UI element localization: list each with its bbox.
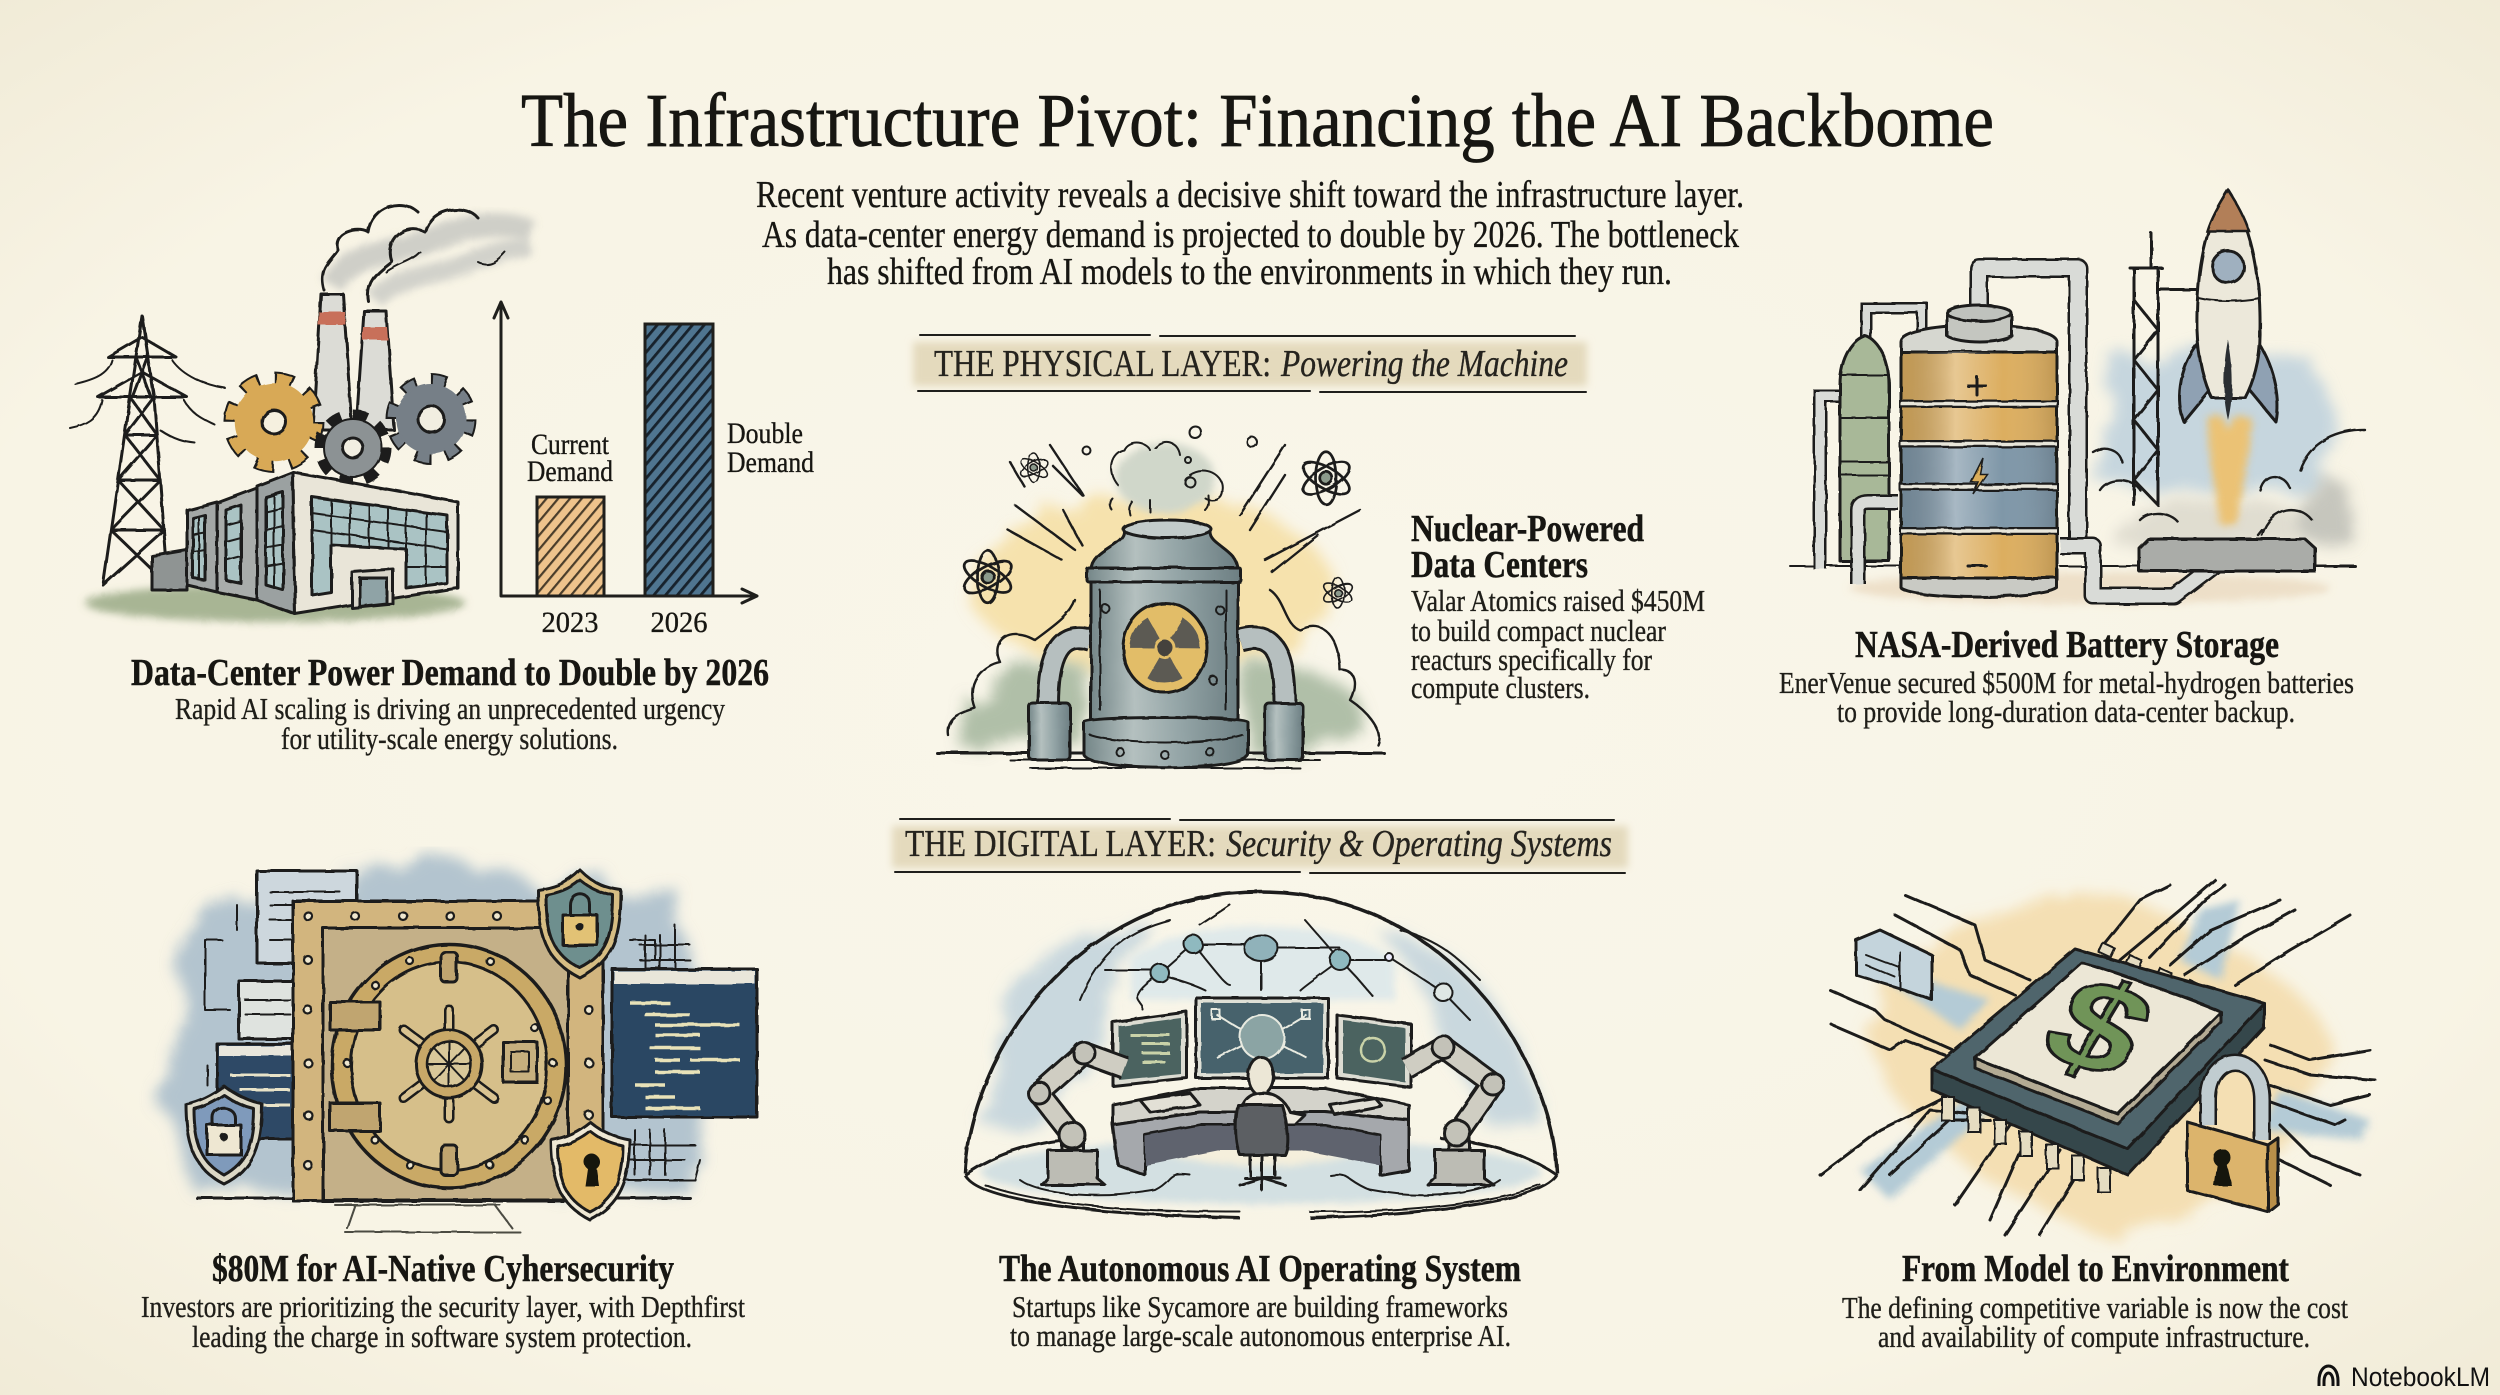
description: power demand (175, 691, 725, 756)
rocket (2180, 190, 2277, 422)
rays and cloud outlines (1008, 445, 1360, 572)
description: operating system (1010, 1289, 1511, 1353)
description: battery: EnerVenue secured $500M for metal-hydrogen batteries (1779, 665, 2354, 700)
banner: digital layer: Security & Operating Systems (1226, 823, 1612, 865)
circuit traces (1820, 880, 2375, 1235)
illustration: factory, pylon and gears (70, 205, 530, 622)
banner: physical layer: Powering the Machine (1280, 343, 1568, 385)
bar chart: demand growth: 2026 (650, 606, 708, 639)
description: nuclear: compute clusters. (1411, 670, 1590, 705)
banner: digital layer (892, 819, 1628, 873)
description: nuclear: Valar Atomics raised $450M (1411, 583, 1705, 618)
robot arms (1028, 1036, 1504, 1185)
heading: cybersecurity: $80M for AI-Native Cyhersecurity (212, 1248, 674, 1290)
circuit grids (625, 925, 700, 1180)
control desk (1113, 1088, 1409, 1175)
radiation symbol (1123, 603, 1207, 693)
bar chart: demand growth: Demand (727, 446, 814, 479)
vault door frame (293, 901, 603, 1201)
blue lock shield (186, 1086, 262, 1184)
steam cloud outline (1110, 442, 1222, 515)
padlock (2187, 1062, 2278, 1212)
description: nuclear (1411, 583, 1705, 705)
smokestacks (313, 294, 394, 430)
intro text block (756, 174, 1744, 293)
description: cybersecurity: Investors are prioritizing the security layer, with Depthfirst (141, 1289, 745, 1324)
description: model to environment: The defining competitive variable is now the cost (1842, 1290, 2348, 1325)
bar chart: demand growth: 2023 (542, 606, 598, 639)
bar chart: demand growth (494, 302, 814, 639)
atoms (960, 452, 1355, 608)
intro text block: Recent venture activity reveals a decisive shift toward the infrastructure layer. (756, 174, 1744, 216)
large steel gear (394, 382, 468, 456)
description: cybersecurity (141, 1289, 745, 1354)
reactor vessel (1084, 520, 1248, 768)
description: battery: to provide long-duration data-center backup. (1837, 694, 2295, 729)
description: power demand: Rapid AI scaling is driving an unprecedented urgency (175, 691, 725, 726)
description: power demand: for utility-scale energy solutions. (281, 721, 618, 756)
heading: nuclear: Nuclear-Powered (1411, 508, 1644, 550)
illustration: compute chip with dollar and padlock (1820, 880, 2375, 1235)
bar chart: demand growth: Double (727, 417, 803, 450)
monitors (1113, 998, 1411, 1087)
illustration: glass dome control room (965, 892, 1557, 1218)
intro text block: has shifted from AI models to the environments in which they run. (827, 251, 1672, 293)
lower side pipe (1858, 502, 1898, 584)
heading: nuclear: Data Centers (1411, 544, 1588, 586)
battery stack (1899, 305, 2059, 597)
launch platform (2139, 539, 2315, 571)
panel: data-center power demand (70, 205, 814, 756)
gold keyhole shield (551, 1122, 630, 1220)
battery pipes (1820, 268, 2225, 596)
code window (612, 969, 757, 1117)
chip package (1932, 943, 2264, 1192)
NotebookLM logo: NotebookLM (2351, 1362, 2490, 1392)
intro text block: As data-center energy demand is projected to double by 2026. The bottleneck (762, 214, 1739, 256)
reactor pipes (1029, 638, 1303, 760)
launch tower (2130, 233, 2197, 505)
data-center building (152, 472, 458, 614)
teal lock shield (538, 870, 621, 978)
panel: from model to environment (1820, 880, 2375, 1354)
description: operating system: Startups like Sycamore are building frameworks (1012, 1289, 1508, 1324)
illustration: battery and rocket (1790, 190, 2365, 604)
banner: digital layer: THE DIGITAL LAYER: (905, 823, 1216, 865)
network nodes (1080, 905, 1480, 1020)
banner: physical layer: THE PHYSICAL LAYER: (934, 343, 1271, 385)
panel: AI-native cybersecurity (141, 865, 757, 1354)
heading: operating system: The Autonomous AI Operating System (999, 1248, 1521, 1290)
illustration: nuclear reactor (937, 426, 1384, 768)
description: battery (1779, 665, 2354, 729)
panel: autonomous AI operating system (965, 892, 1557, 1353)
dome outline (965, 892, 1557, 1173)
description: operating system: to manage large-scale autonomous enterprise AI. (1010, 1318, 1511, 1353)
panel: nuclear-powered data centers (937, 426, 1705, 768)
heading: battery: NASA-Derived Battery Storage (1855, 624, 2279, 666)
gold gear (233, 381, 315, 463)
description: cybersecurity: leading the charge in software system protection. (192, 1319, 692, 1354)
description: nuclear: to build compact nuclear (1411, 613, 1667, 648)
heading: power demand: Data-Center Power Demand to Double by 2026 (131, 652, 769, 694)
bar chart: demand growth: Current (531, 428, 610, 461)
small steel gear (322, 417, 384, 479)
illustration: bank vault with shields (165, 865, 757, 1232)
exhaust flame (2207, 415, 2252, 525)
operator and chair (1236, 1057, 1305, 1190)
heading: model to environment: From Model to Environment (1902, 1248, 2289, 1290)
server block (1856, 930, 1932, 1000)
description: nuclear: reacturs specifically for (1411, 642, 1653, 677)
banner: physical layer (913, 335, 1587, 392)
document windows (205, 871, 357, 1139)
green gas tank (1840, 336, 1889, 561)
description: model to environment: and availability of compute infrastructure. (1878, 1319, 2310, 1354)
bar chart: demand growth: Demand (527, 455, 613, 488)
description: model to environment (1842, 1290, 2348, 1354)
heading: nuclear (1411, 508, 1644, 586)
dollar sign: $ (2019, 950, 2179, 1105)
panel: NASA-derived battery storage (1779, 190, 2365, 729)
title: The Infrastructure Pivot: Financing the AI Backbome (521, 79, 1994, 163)
transmission pylon (70, 316, 225, 585)
